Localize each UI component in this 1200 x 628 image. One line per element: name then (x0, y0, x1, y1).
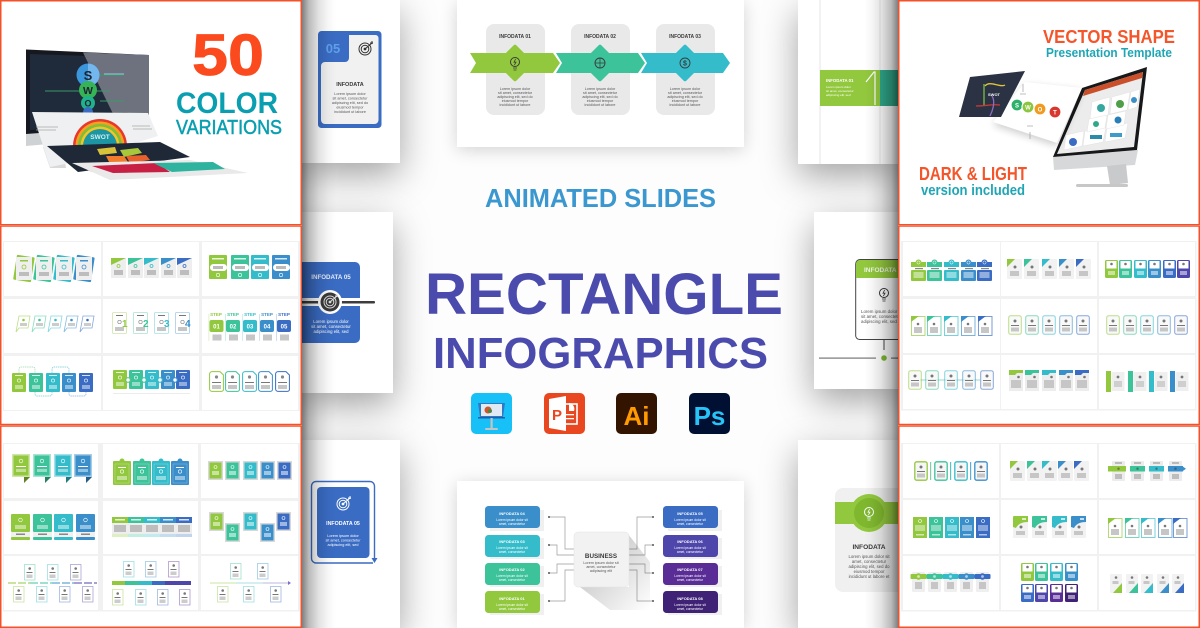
center box business (574, 532, 650, 610)
card: infodata with bulb badge (835, 488, 915, 592)
text: dark and light: DARK & LIGHT (919, 164, 1027, 184)
connector lines (548, 516, 654, 602)
right box 07: INFODATA 07 (677, 567, 704, 572)
icon: photoshop (689, 393, 730, 434)
right box 05 (663, 506, 722, 531)
card: blue 05 infodata: eiusmod tempor (336, 106, 364, 110)
right box 08: amet, consectetur (677, 607, 704, 611)
right box 06 (663, 535, 722, 559)
slide: center bottom business map (457, 481, 744, 628)
thumb: staggered cards (201, 501, 298, 554)
left box 04: amet, consectetur (499, 522, 526, 526)
illustration: desktop monitor with slides: O (1038, 108, 1043, 114)
thumb: arrow timeline (201, 556, 298, 610)
icon: powerpoint (544, 393, 585, 434)
step: infodata 03: INFODATA 03 (669, 34, 701, 40)
step: infodata 02: Lorem ipsum dolor (585, 87, 616, 91)
text: color: COLOR (176, 87, 278, 120)
left box 04 (485, 506, 544, 531)
thumb: cards with footer bars (4, 501, 98, 554)
left box 04: Lorem ipsum dolor sit (496, 518, 528, 522)
icon: photoshop: Ps (694, 401, 725, 431)
icon: illustrator: Ai (624, 401, 650, 431)
illustration: monitor with swot slides: O (84, 98, 92, 108)
thumb: dashed timeline (4, 556, 98, 610)
thumb: joined cards with circles (103, 356, 199, 410)
card: infodata with bulb badge: INFODATA (852, 544, 886, 551)
thumb: corner flag cards (1001, 242, 1097, 296)
icon: illustrator (616, 393, 657, 434)
illustration: desktop monitor with slides: SWOT (988, 92, 1001, 97)
band: infodata 01: sit amet, consectetur (826, 89, 854, 93)
thumb: six colour frames (1099, 242, 1195, 296)
thumb: outlined small cards (1099, 500, 1195, 554)
left box 03: Lorem ipsum dolor sit (496, 546, 528, 550)
step: infodata 02: sit amet, consectetur (583, 91, 618, 95)
band: infodata 01: Lorem ipsum dolor (826, 85, 851, 89)
slide: left bottom with framed card (302, 440, 400, 628)
text: version included: version included (921, 182, 1025, 199)
left box 02: INFODATA 02 (499, 567, 526, 572)
left box 03: INFODATA 03 (499, 539, 526, 544)
step: infodata 01: eiusmod tempor (502, 99, 529, 103)
left column shadow (302, 0, 336, 628)
thumb: linked rounded cards (903, 355, 1000, 409)
card: blue 05 infodata: Lorem ipsum dolor (334, 92, 366, 96)
step: infodata 03 (641, 24, 730, 115)
step: infodata 02: INFODATA 02 (584, 34, 616, 40)
thumb: tabbed colour cards (903, 242, 1000, 296)
left box 01 (485, 591, 544, 615)
thumb: steps 01 to 05: STEP (244, 312, 256, 317)
thumb: bracket cards (903, 444, 999, 498)
text: 50: 50 (192, 23, 264, 88)
step: infodata 03: $ (683, 60, 687, 68)
illustration: monitor with swot slides: S (84, 68, 93, 83)
left box 01: INFODATA 01 (499, 596, 526, 601)
icon: powerpoint: P (552, 407, 562, 424)
card: framed infodata 05 with arrow: Lorem ipsum dolor (327, 534, 359, 538)
right box 05: Lorem ipsum dolor sit (674, 518, 706, 522)
thumb: solid colour cards (903, 500, 999, 554)
thumb: outlined corner cards (903, 299, 1000, 353)
subtitle: animated slides: ANIMATED SLIDES (485, 183, 716, 213)
step: infodata 02: adipiscing elit, sed do (582, 95, 618, 99)
thumb: tabbed gray cards (1001, 355, 1097, 409)
thumb: outline cut-corner cards (202, 356, 298, 410)
thumb: numbered outline cards: 1 (122, 319, 128, 330)
card: blue infodata 05: Lorem ipsum dolor (313, 319, 349, 324)
band: infodata 01: INFODATA 01 (826, 78, 854, 83)
left box 01: Lorem ipsum dolor sit (496, 603, 528, 607)
thumb: steps 01 to 05: 01 (213, 324, 220, 330)
thumb: framed small cards (201, 444, 298, 498)
left box 02: Lorem ipsum dolor sit (496, 574, 528, 578)
thumb: bottom corner cards (1099, 556, 1195, 610)
thumb: steps 01 to 05: 04 (264, 324, 271, 330)
thumb: speech bubbles (4, 299, 101, 353)
slide: left top with 05 card (302, 0, 400, 163)
thumb: numbered outline cards: 3 (164, 319, 170, 330)
thumb: steps 01 to 05: 03 (247, 324, 254, 330)
slide: left middle with target line (302, 212, 393, 393)
thumb: pale outline cards (1001, 299, 1097, 353)
thumb: numbered outline cards: 4 (185, 319, 191, 330)
step: infodata 01: adipiscing elit, sed do (497, 95, 533, 99)
right column shadow (864, 0, 898, 628)
card: blue infodata 05: sit amet, consectetur (311, 324, 351, 329)
center title block (425, 183, 783, 434)
card: framed infodata 05 with arrow: sit amet, consectetur (325, 538, 361, 542)
band: infodata 01: adipiscing elit, sed (826, 93, 851, 97)
thumb: tag cards (103, 444, 198, 498)
right box 05: amet, consectetur (677, 522, 704, 526)
text: variations: VARIATIONS (176, 117, 282, 139)
thumb: steps 01 to 05: 05 (281, 324, 288, 330)
thumb: numbered outline cards (103, 299, 199, 353)
card: infodata with bulb badge: eiusmod tempor (854, 569, 885, 574)
card: framed infodata 05 with arrow: INFODATA 05 (326, 521, 360, 527)
thumb: curved header cards (1001, 500, 1097, 554)
thumb: steps 01 to 05: STEP (278, 312, 290, 317)
right box 06: Lorem ipsum dolor sit (674, 546, 706, 550)
thumb: flag cards (103, 242, 199, 296)
title: rectangle: RECTANGLE (425, 262, 783, 327)
step: infodata 03: adipiscing elit, sed do (667, 95, 703, 99)
illustration: desktop monitor with slides: T (1053, 110, 1057, 116)
slide: right bottom with round badge (798, 440, 898, 628)
text: vector shape: VECTOR SHAPE (1043, 26, 1175, 47)
step: infodata 01: incididunt ut labore (500, 103, 530, 107)
thumb: table columns (103, 501, 198, 554)
right box 07: Lorem ipsum dolor sit (674, 574, 706, 578)
step: infodata 02: incididunt ut labore (585, 103, 615, 107)
right box 07 (663, 563, 722, 587)
thumb: tilted cards (4, 242, 101, 296)
card: infodata with bulb badge: Lorem ipsum dolor sit (848, 554, 890, 559)
thumb: solid timeline (103, 556, 198, 610)
thumb: steps 01 to 05: STEP (210, 312, 222, 317)
panel: right thumbnails lower (898, 425, 1200, 628)
card: blue infodata 05: adipiscing elit, sed (313, 329, 349, 334)
thumb: steps 01 to 05: 02 (230, 324, 237, 330)
card: infodata with bulb badge: amet, consectetur (852, 559, 887, 564)
step: infodata 01 (470, 24, 560, 115)
card: infodata with bulb badge: incididunt ut labore et (849, 574, 890, 579)
right box 08: INFODATA 08 (677, 596, 704, 601)
icon: keynote (471, 393, 512, 434)
thumb: band cards (903, 556, 999, 610)
title: infographics: INFOGRAPHICS (433, 329, 768, 378)
step: infodata 02 (556, 24, 645, 115)
step: infodata 03: Lorem ipsum dolor (670, 87, 701, 91)
card: blue infodata 05: INFODATA 05 (311, 274, 351, 281)
thumb: ribbon cards (4, 444, 98, 498)
thumb: linked pale cards (1099, 299, 1195, 353)
left box 01: amet, consectetur (499, 607, 526, 611)
right box 05: INFODATA 05 (677, 511, 704, 516)
step: infodata 01: INFODATA 01 (499, 34, 531, 40)
card: outlined infodata with connector: Lorem ipsum dolor (861, 309, 898, 314)
step: infodata 01: sit amet, consectetur (498, 91, 533, 95)
thumb: side bar cards (1099, 355, 1195, 409)
center box business: amet, consectetur (586, 565, 616, 569)
card: blue infodata 05 (296, 262, 375, 343)
card: framed infodata 05 with arrow: adipiscing elit, sed (327, 543, 359, 547)
panel: left thumbnails upper (0, 225, 302, 425)
panel: vector shape presentation template (898, 0, 1200, 225)
slide: right top with green band (798, 0, 898, 164)
illustration: desktop monitor with slides (959, 67, 1147, 187)
center box business: Lorem ipsum dolor sit (583, 561, 619, 565)
right box 06: amet, consectetur (677, 550, 704, 554)
right box 06: INFODATA 06 (677, 539, 704, 544)
band: infodata 01 (820, 0, 898, 164)
panel: left thumbnails lower (0, 425, 302, 628)
panel: right thumbnails upper (898, 225, 1200, 425)
thumb: steps 01 to 05 (202, 299, 298, 353)
right box 07: amet, consectetur (677, 578, 704, 582)
thumb: linked colour cards (4, 356, 101, 410)
step: infodata 02: eiusmod tempor (587, 99, 614, 103)
step: infodata 03: sit amet, consectetur (668, 91, 703, 95)
step: infodata 03: incididunt ut labore (670, 103, 700, 107)
card: blue 05 infodata: sit amet, consectetur (332, 96, 368, 100)
card: blue 05 infodata: adipiscing elit, sed do (332, 101, 368, 105)
slide: center top three arrows (457, 0, 744, 147)
illustration: desktop monitor with slides: W (1025, 106, 1031, 112)
panel: 50 color variations (0, 0, 302, 225)
left box 02: amet, consectetur (499, 578, 526, 582)
thumb: numbered outline cards: 2 (143, 319, 149, 330)
card: outlined infodata with connector (819, 260, 906, 361)
card: blue 05 infodata: incididunt ut labore (334, 110, 366, 114)
card: infodata with bulb badge: adipiscing elit, sed do (848, 564, 890, 569)
thumb: colour cards with pill (202, 242, 298, 296)
thumb: steps 01 to 05: STEP (227, 312, 239, 317)
right box 08 (663, 591, 722, 615)
thumb: arrow strip cards (1099, 444, 1195, 498)
illustration: monitor with swot slides: SWOT (90, 134, 110, 141)
left box 02 (485, 563, 544, 587)
illustration: monitor with swot slides (26, 50, 248, 180)
slide: right middle outline card (814, 212, 898, 389)
thumb: steps 01 to 05: STEP (261, 312, 273, 317)
thumb: curved corner cards (1001, 444, 1097, 498)
card: blue 05 infodata (318, 31, 382, 128)
illustration: desktop monitor with slides: S (1015, 104, 1019, 110)
step: infodata 01: Lorem ipsum dolor (500, 87, 531, 91)
right box 08: Lorem ipsum dolor sit (674, 603, 706, 607)
left box 04: INFODATA 04 (499, 511, 526, 516)
card: blue 05 infodata: 05 (326, 41, 340, 56)
card: framed infodata 05 with arrow (312, 482, 378, 563)
text: presentation template: Presentation Template (1046, 45, 1172, 60)
center box business: BUSINESS (585, 553, 617, 560)
card: blue 05 infodata: INFODATA (336, 82, 364, 88)
card: outlined infodata with connector: adipiscing elit, sed (861, 319, 897, 324)
illustration: monitor with swot slides: W (83, 85, 93, 97)
center box business: adipiscing elit (590, 569, 612, 573)
left box 03 (485, 535, 544, 559)
left box 03: amet, consectetur (499, 550, 526, 554)
thumb: two rows eight cards (1001, 556, 1097, 610)
step: infodata 03: eiusmod tempor (672, 99, 699, 103)
